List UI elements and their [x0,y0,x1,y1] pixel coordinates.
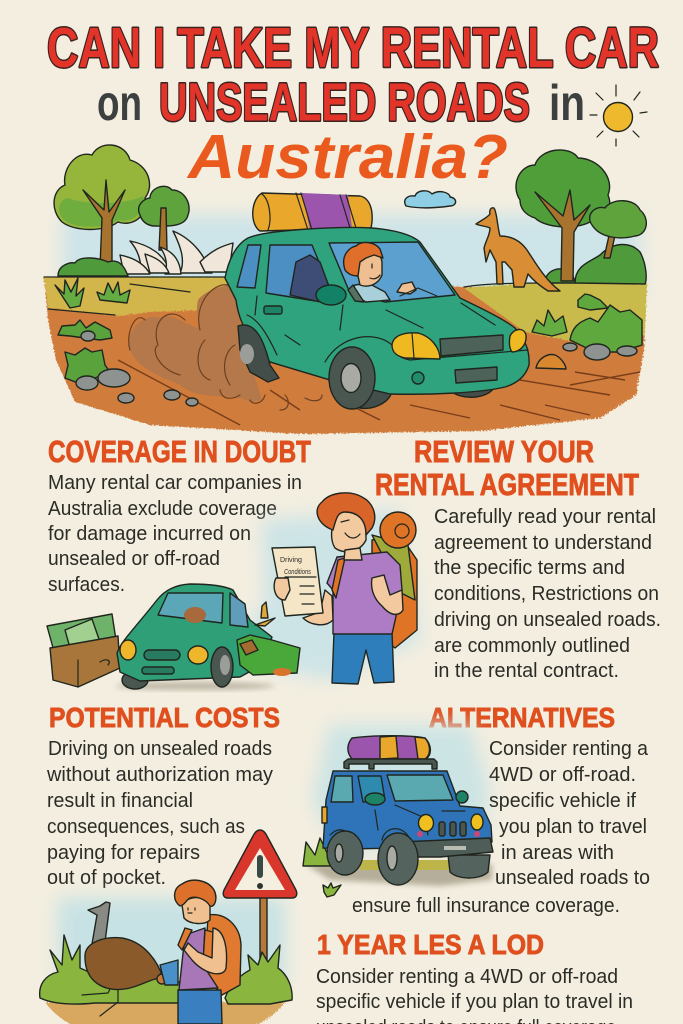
section: potential costs: without authorization may [46,764,273,786]
section: alternatives body: specific vehicle if [489,790,636,812]
tree left large [54,145,150,267]
section: coverage in doubt: surfaces. [48,574,125,596]
section: coverage in doubt: unsealed or off-road [48,548,220,570]
icon: sun [590,85,647,146]
section: alternatives body: 4WD or off-road. [489,764,636,786]
section: review your rental agreement body: the specific terms and [434,557,625,579]
ground [44,277,647,434]
section: potential costs [46,702,280,889]
small grass tuft [323,883,341,897]
emu [82,902,167,1016]
title: UNSEALED ROADS [159,72,530,132]
section heading: alternatives: ALTERNATIVES [429,702,615,733]
arm and paper: Driving [280,557,302,564]
grass [40,935,292,1004]
shirt [327,552,402,634]
section: review your rental agreement body: agreement to understand [434,532,652,554]
title: in [549,75,585,131]
opera house [120,231,233,274]
title: Australia? [186,123,508,192]
traveller [160,880,241,1024]
luggage on roof [253,193,372,231]
sky wash [58,898,285,985]
left foreground plants and rocks [55,278,198,406]
section: potential costs: Driving on unsealed roads [48,738,272,760]
illustration: hero scene [44,145,647,434]
section: review your rental agreement body: driving on unsealed roads. [434,609,661,631]
section: review your rental agreement body [434,506,661,682]
warning sign [223,830,297,962]
section: coverage in doubt: Many rental car companies in [48,472,302,494]
head and hair [317,493,375,560]
illustration: traveller reading contract and damaged car [47,493,420,690]
rear tyre [327,831,363,875]
windshield [329,242,455,302]
section: coverage in doubt [48,434,311,596]
headlights and vents [418,814,434,832]
sky wash [62,215,640,300]
wash [312,725,490,850]
front tyre [329,347,375,409]
headlights [392,333,440,359]
damaged green car [115,584,300,690]
windows [237,245,261,288]
right foreground plants and rocks [532,294,642,369]
illustration: traveller with emu and warning sign [40,830,297,1024]
car body [225,227,529,394]
section: alternatives body: you plan to travel [499,816,647,838]
section heading: review your rental agreement: REVIEW YOUR [414,434,594,469]
section: alternatives body: in areas with [501,842,614,864]
windows [331,776,353,802]
tree left small [139,186,189,250]
section: alternatives body: Consider renting a [489,738,649,760]
luggage [348,736,430,759]
title [47,16,659,192]
rear tyre [238,325,279,382]
far tyres [360,370,392,408]
section: potential costs: out of pocket. [47,867,166,889]
illustration: blue four wheel drive [303,725,493,897]
cloud [405,191,456,208]
front tyre [378,833,418,885]
right tyre [448,855,490,878]
arm and paper [272,547,333,625]
section: potential costs: paying for repairs [47,842,200,864]
tree right large [516,150,610,281]
section: alternatives body [352,738,650,917]
dust cloud [129,283,322,410]
grille [440,335,503,356]
passenger seat [290,255,331,303]
section: coverage in doubt: Australia exclude coverage [48,498,277,520]
section: 1 year les a lod [316,929,633,1024]
roof rack [344,759,437,769]
ground [305,864,492,886]
bumper [400,838,493,857]
tree right small [590,201,646,258]
ground [45,1002,285,1024]
section: review your rental agreement body: are commonly outlined [434,635,630,657]
title: on [97,75,142,131]
section: alternatives body: unsealed roads to [495,867,650,889]
bushes behind horizon [58,244,646,284]
other arm [372,575,403,614]
jeans [332,632,394,684]
section: potential costs: consequences, such as [47,816,245,838]
section: 1 year les a lod: 1 YEAR LES A LOD [317,929,544,960]
section: coverage in doubt: for damage incurred on [48,523,251,545]
blue body [323,771,492,849]
section: review your rental agreement body: conditions, Restrictions on [434,583,659,605]
section heading: review your rental agreement [375,434,639,502]
section: potential costs: result in financial [47,790,193,812]
blue wash [230,510,420,680]
section: review your rental agreement body: Carefully read your rental [434,506,656,528]
section: 1 year les a lod: specific vehicle if you plan to travel in [316,991,633,1013]
section: alternatives body: ensure full insurance coverage. [352,895,620,917]
kangaroo [476,208,560,291]
green car [225,227,529,409]
arm and paper: Conditions [284,569,311,576]
section: coverage in doubt: COVERAGE IN DOUBT [48,434,311,469]
section: review your rental agreement body: in the rental contract. [434,660,619,682]
box of cash [47,614,120,687]
backpack [372,512,417,648]
door details [247,296,528,380]
section: potential costs: POTENTIAL COSTS [49,702,280,733]
driver [344,242,437,302]
section: 1 year les a lod: Consider renting a 4WD or off-road [316,966,618,988]
side mirror [316,285,346,305]
